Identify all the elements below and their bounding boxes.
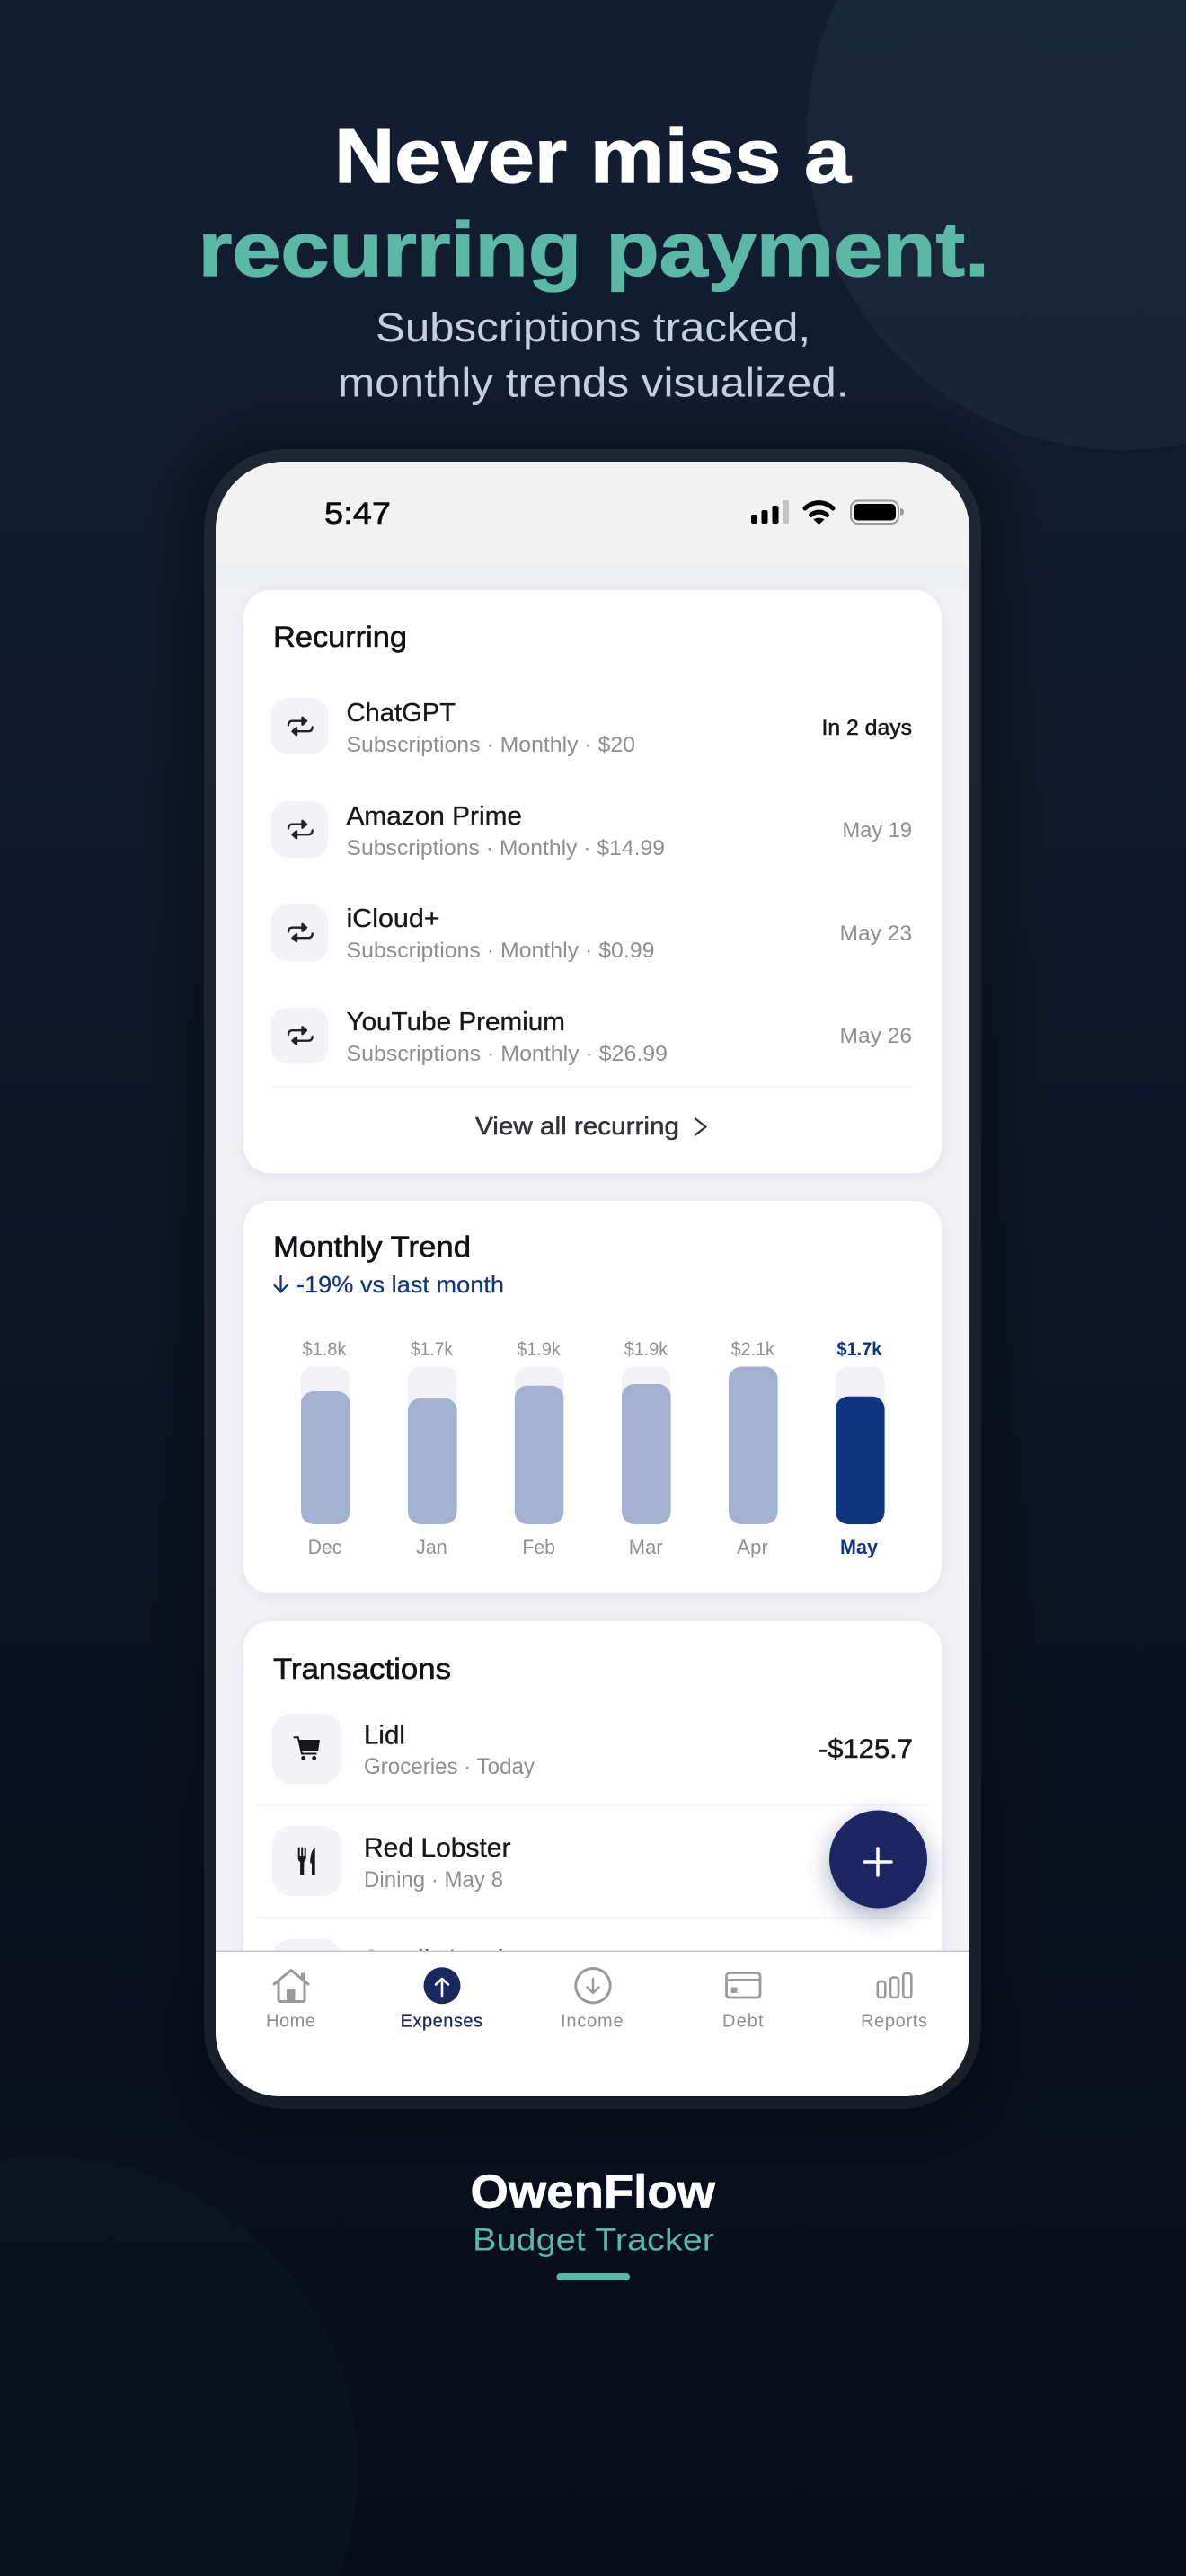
- phone screen: [216, 462, 969, 2096]
- tab: expenses (active): Expenses: [401, 2012, 482, 2032]
- bar chart: $2.1k: [731, 1339, 775, 1360]
- tab: reports: Reports: [861, 2012, 927, 2032]
- row: YouTube Premium: [271, 1008, 912, 1066]
- row: Amazon Prime: May 19: [843, 818, 912, 842]
- brand footer: [471, 2166, 716, 2280]
- tab: expenses (active): [401, 1967, 482, 2032]
- subheading: Subscriptions tracked,: [376, 304, 810, 350]
- row: Red Lobster: Red Lobster: [364, 1833, 511, 1863]
- row: Amazon Prime: [271, 801, 912, 860]
- tab: debt: [722, 1972, 764, 2032]
- bar chart: May: [840, 1536, 879, 1558]
- subheading: [338, 304, 848, 406]
- button: add (FAB): [829, 1811, 927, 1908]
- headline: [198, 114, 989, 293]
- panel: recurring: [243, 590, 942, 1173]
- bar chart: $1.9k: [517, 1339, 561, 1360]
- tab: reports: [861, 1973, 927, 2032]
- icon: cart: [294, 1737, 320, 1760]
- icon: fork and knife: [298, 1848, 315, 1875]
- trend note: -19% vs last month: [296, 1271, 504, 1298]
- panel: transactions: [243, 1621, 942, 1951]
- row: Red Lobster: Dining · May 8: [364, 1867, 503, 1892]
- row: Red Lobster: [272, 1826, 511, 1896]
- tab bar: [216, 1951, 969, 2096]
- row: ChatGPT: [271, 698, 912, 757]
- bar chart: $1.7k: [411, 1339, 453, 1360]
- bar chart: [301, 1339, 885, 1558]
- trend note: [273, 1275, 503, 1293]
- heading: transactions: Transactions: [273, 1653, 451, 1685]
- phone: [180, 431, 1006, 2138]
- tab: home: [266, 1971, 315, 2032]
- brand footer: OwenFlow: [471, 2166, 716, 2219]
- status bar: [216, 462, 969, 530]
- heading: monthly trend: Monthly Trend: [273, 1231, 471, 1263]
- heading: recurring: Recurring: [273, 621, 407, 653]
- row: ChatGPT: In 2 days: [821, 716, 912, 740]
- bar chart: $1.8k: [302, 1339, 347, 1360]
- link: view all recurring: View all recurring: [475, 1112, 679, 1140]
- row: ChatGPT: Subscriptions · Monthly · $20: [347, 733, 635, 757]
- row: ChatGPT: ChatGPT: [347, 699, 456, 728]
- bar chart: $1.7k: [836, 1339, 882, 1360]
- headline: Never miss a: [334, 114, 852, 199]
- bar chart: Dec: [308, 1536, 341, 1558]
- subheading: monthly trends visualized.: [338, 359, 848, 406]
- row: iCloud+: May 23: [839, 922, 912, 946]
- bar chart: Jan: [416, 1536, 447, 1558]
- row: Lidl: Lidl: [364, 1721, 405, 1750]
- status bar: 5:47: [324, 497, 391, 531]
- row: Lidl: [272, 1714, 913, 1784]
- tab: income: [561, 1969, 624, 2032]
- headline: recurring payment.: [198, 207, 989, 293]
- tab: income: Income: [561, 2012, 624, 2032]
- row: Amazon Prime: Subscriptions · Monthly · $14.99: [347, 836, 665, 860]
- bar chart: Apr: [737, 1536, 768, 1558]
- row: YouTube Premium: May 26: [839, 1024, 912, 1048]
- tab: debt: Debt: [722, 2012, 764, 2032]
- row: Amazon Prime: Amazon Prime: [347, 802, 522, 831]
- bar chart: Feb: [522, 1536, 555, 1558]
- tab: home: Home: [266, 2012, 315, 2032]
- row: iCloud+: iCloud+: [347, 904, 440, 933]
- row: iCloud+: Subscriptions · Monthly · $0.99: [347, 939, 654, 963]
- row: Lidl: Groceries · Today: [364, 1754, 535, 1779]
- row: YouTube Premium: Subscriptions · Monthly · $26.99: [347, 1042, 668, 1066]
- row: Lidl: -$125.7: [819, 1734, 913, 1764]
- row: YouTube Premium: YouTube Premium: [347, 1008, 565, 1037]
- bar chart: Mar: [629, 1536, 663, 1558]
- brand footer: Budget Tracker: [473, 2222, 714, 2258]
- row: iCloud+: [271, 904, 912, 963]
- bar chart: $1.9k: [624, 1339, 668, 1360]
- row: clipped third transaction: [274, 1939, 501, 1951]
- panel: monthly trend: [243, 1201, 942, 1593]
